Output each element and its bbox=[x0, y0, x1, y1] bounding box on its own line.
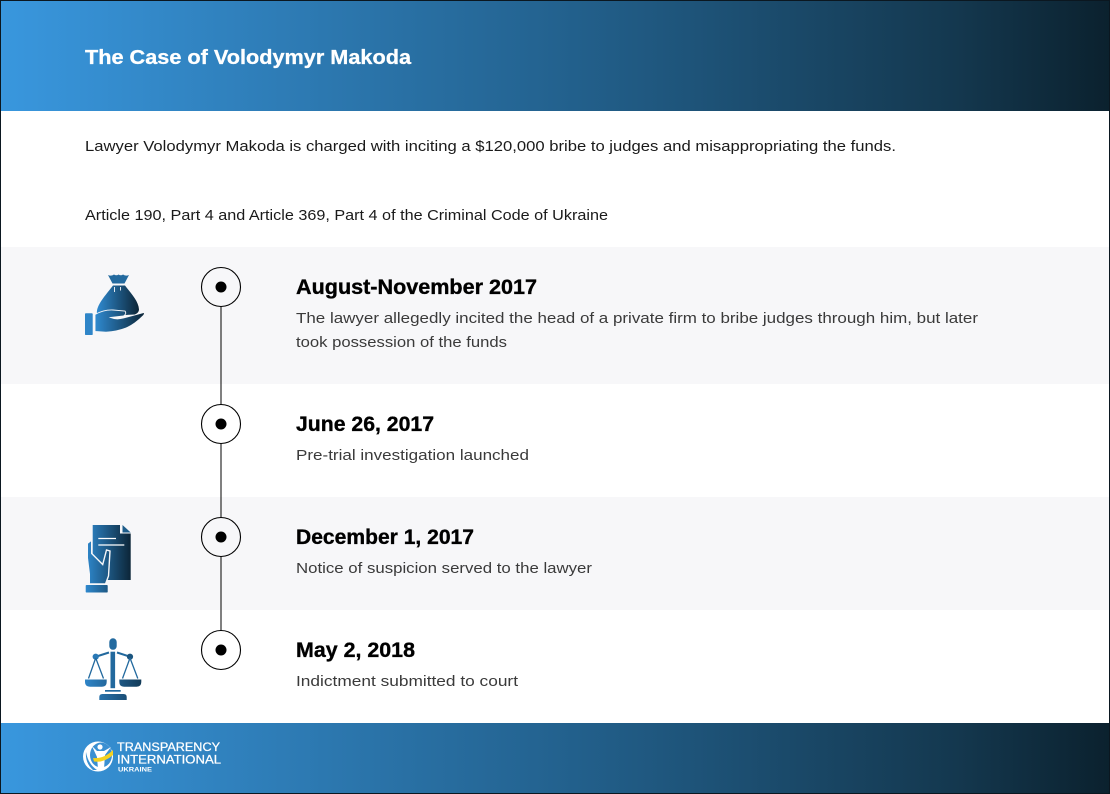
timeline marker 4 bbox=[202, 630, 240, 670]
timeline marker 2 bbox=[202, 404, 240, 444]
footer banner bbox=[0, 723, 1110, 794]
event 4 heading: May 2, 2018 bbox=[296, 639, 415, 662]
legal articles text: Article 190, Part 4 and Article 369, Part 4 of the Criminal Code of Ukraine bbox=[85, 207, 608, 224]
event 3 heading: December 1, 2017 bbox=[296, 526, 474, 549]
event 2 heading: June 26, 2017 bbox=[296, 413, 434, 436]
logo: Transparency International Ukraine: TRANSPARENCY bbox=[117, 740, 220, 754]
event 1 description: took possession of the funds bbox=[296, 334, 507, 351]
icon: scales of justice bbox=[85, 638, 141, 700]
event 2 description: Pre-trial investigation launched bbox=[296, 447, 529, 464]
event 1 description: The lawyer allegedly incited the head of a private firm to bribe judges through him, but later bbox=[296, 310, 978, 327]
logo: Transparency International Ukraine: UKRAINE bbox=[118, 766, 153, 774]
icon: document in hand bbox=[86, 525, 131, 592]
logo: Transparency International Ukraine bbox=[83, 740, 221, 774]
event 1 heading: August-November 2017 bbox=[296, 276, 537, 299]
icon: money bag on hand bbox=[85, 274, 144, 335]
event 3 description: Notice of suspicion served to the lawyer bbox=[296, 560, 592, 577]
event 1 description bbox=[296, 310, 978, 351]
timeline connector line bbox=[220, 306, 222, 631]
logo: Transparency International Ukraine: INTERNATIONAL bbox=[117, 752, 221, 766]
event 4 description: Indictment submitted to court bbox=[296, 673, 519, 690]
row background: August-November 2017 bbox=[0, 247, 1110, 384]
header banner bbox=[0, 0, 1110, 111]
timeline marker 1 bbox=[202, 268, 240, 306]
summary text: Lawyer Volodymyr Makoda is charged with inciting a $120,000 bribe to judges and misappropriating the funds. bbox=[85, 138, 896, 155]
timeline marker 3 bbox=[202, 518, 240, 556]
title: The Case of Volodymyr Makoda bbox=[85, 47, 412, 69]
row background: December 1, 2017 bbox=[0, 497, 1110, 610]
